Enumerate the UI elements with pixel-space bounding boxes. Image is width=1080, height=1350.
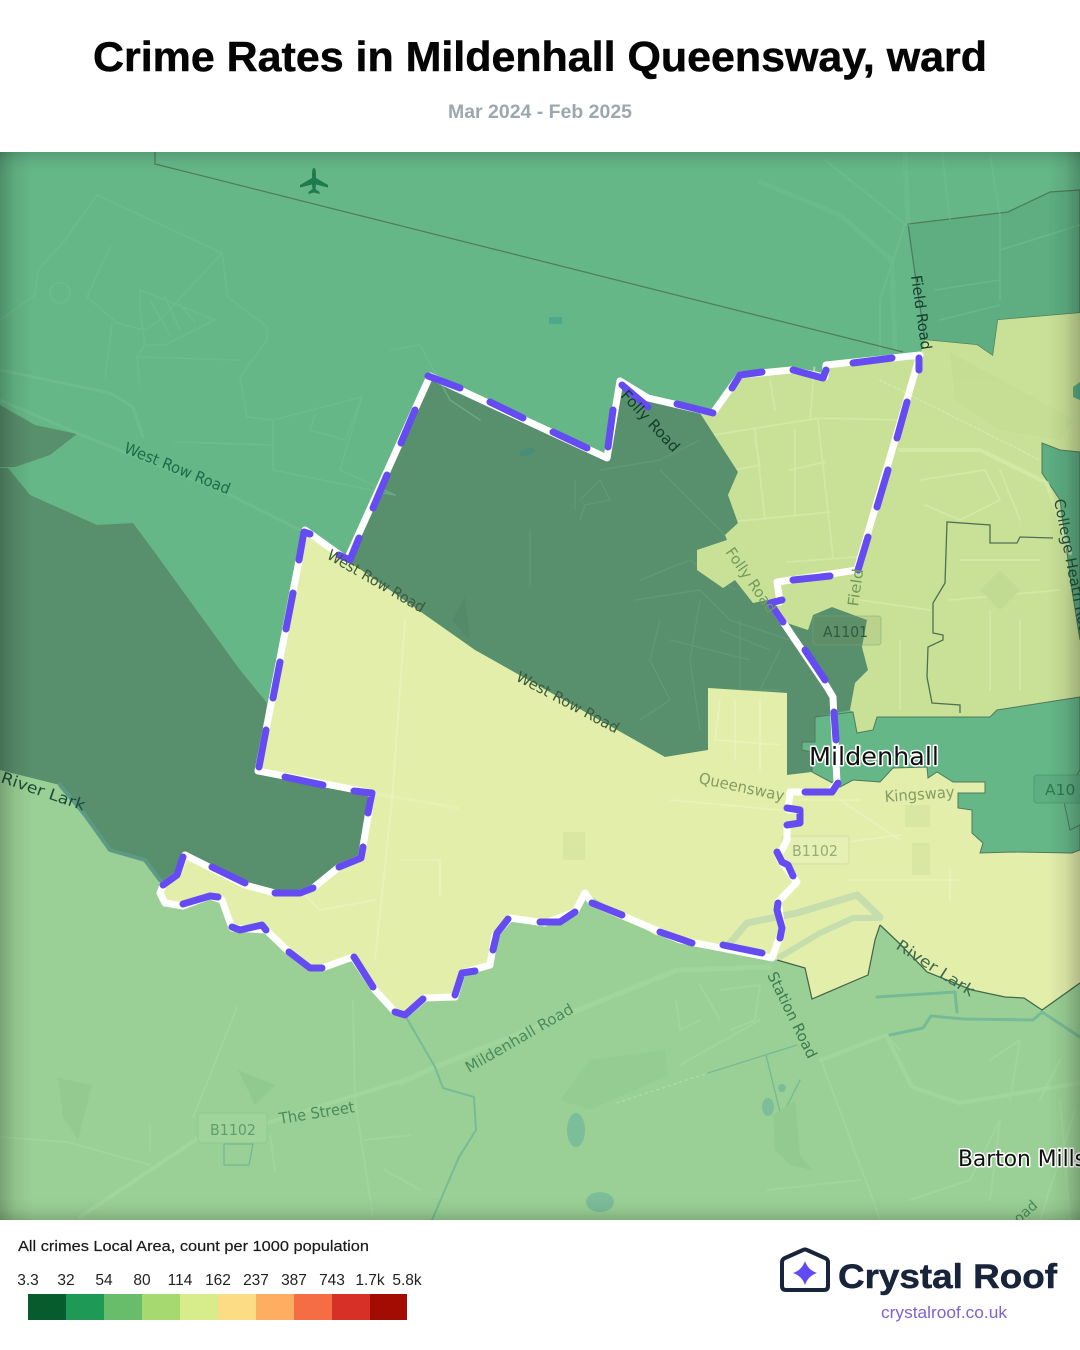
title: Crime Rates in Mildenhall Queensway, ward bbox=[93, 33, 987, 80]
road shield: A10 bbox=[1034, 775, 1080, 803]
legend scale labels: 237 bbox=[243, 1272, 269, 1289]
legend scale labels: 162 bbox=[205, 1272, 231, 1289]
legend scale labels: 3.3 bbox=[17, 1272, 39, 1289]
ward boundary: Station Road edge bbox=[777, 925, 880, 999]
map area: medium green Mildenhall centre bbox=[802, 697, 1080, 853]
map area: inner north-east ward outline bbox=[927, 522, 1053, 713]
legend title: All crimes Local Area, count per 1000 population bbox=[18, 1238, 369, 1255]
map edge vignette bbox=[0, 152, 1080, 1220]
map area: green pocket far east bbox=[1073, 382, 1080, 400]
legend scale labels: 80 bbox=[133, 1272, 151, 1289]
legend scale labels: 5.8k bbox=[392, 1272, 422, 1289]
logo wordmark: Crystal Roof bbox=[838, 1258, 1058, 1296]
map area: pale yellow ward and town south bbox=[162, 530, 1080, 1014]
subtitle: date range: Mar 2024 - Feb 2025 bbox=[448, 102, 632, 123]
roads on pale yellow bbox=[300, 620, 960, 960]
road label: Field south: Field bbox=[844, 567, 867, 608]
legend scale labels: 1.7k bbox=[355, 1272, 385, 1289]
road shield: B1102 town: B1102 bbox=[792, 842, 838, 860]
road label: Queensway: Queensway bbox=[697, 769, 786, 805]
road label: clipped road: oad bbox=[1011, 1198, 1041, 1227]
river label: River Lark west: River Lark bbox=[0, 769, 88, 814]
ward outline: purple dashes bbox=[163, 358, 919, 1015]
river label: River Lark east: River Lark bbox=[893, 936, 978, 1000]
icon: house with star bbox=[782, 1250, 828, 1290]
ward boundary: River Lark edge east bbox=[880, 925, 1080, 1010]
map area: green pocket east edge bbox=[1042, 443, 1080, 640]
legend colour scale bbox=[28, 1294, 407, 1320]
road label: Folly Road north: Folly Road bbox=[617, 386, 683, 456]
River Lark water west bbox=[60, 785, 160, 880]
road label: West Row Road west: West Row Road bbox=[122, 439, 233, 498]
ward outline: white line bbox=[160, 355, 920, 1015]
road label: Field Road north: Field Road bbox=[907, 274, 935, 351]
map area: dark green centre bbox=[347, 376, 868, 775]
legend scale labels: 54 bbox=[95, 1272, 113, 1289]
map area: southern light green bbox=[0, 770, 1080, 1220]
road label: Station Road: Station Road bbox=[763, 969, 821, 1061]
map roads and minor features bbox=[0, 152, 1080, 1220]
legend scale labels: 114 bbox=[168, 1272, 193, 1289]
road shield: A10: A10 bbox=[1045, 781, 1075, 799]
road label: Mildenhall Road: Mildenhall Road bbox=[462, 1000, 577, 1076]
road label: Folly Road south: Folly Road bbox=[722, 544, 780, 617]
ponds and woodland patches bbox=[58, 317, 812, 1212]
map area: light yellow-green north-east bbox=[697, 313, 1080, 733]
legend scale labels: 32 bbox=[57, 1272, 75, 1289]
map labels bbox=[0, 274, 1080, 1227]
choropleth map bbox=[0, 152, 1080, 1227]
road shield: A1101 bbox=[813, 616, 881, 645]
map area: dark green lobe bbox=[0, 405, 77, 467]
legend scale labels bbox=[17, 1272, 422, 1289]
logo: Crystal Roof bbox=[782, 1250, 1058, 1322]
legend scale labels: 743 bbox=[319, 1272, 345, 1289]
road label: West Row Road centre: West Row Road bbox=[513, 668, 622, 737]
road shield: B1102 south bbox=[198, 1113, 267, 1143]
legend scale labels: 387 bbox=[281, 1272, 307, 1289]
roads on light yellow-green bbox=[713, 352, 1075, 710]
ward boundary: airfield line bbox=[155, 152, 903, 352]
main road: West Row Road bbox=[0, 370, 300, 530]
roads on medium green bbox=[383, 212, 1080, 496]
road shield: B1102 town bbox=[782, 836, 849, 864]
map area: dark green west bbox=[0, 468, 372, 893]
roads on lower green bbox=[0, 967, 1080, 1220]
church outline near The Street bbox=[224, 1144, 253, 1165]
map area: north-east green ward bbox=[908, 190, 1080, 356]
road label: The Street: The Street bbox=[277, 1098, 356, 1128]
roads on dark green bbox=[520, 440, 794, 730]
river channels through town bbox=[730, 895, 880, 943]
road label: West Row Road ward edge: West Row Road bbox=[324, 546, 428, 616]
ward outline with dashes bbox=[160, 355, 920, 1015]
legend bbox=[17, 1238, 422, 1320]
place label: Mildenhall: Mildenhall bbox=[809, 742, 939, 771]
website link text: crystalroof.co.uk bbox=[881, 1304, 1008, 1322]
icon: airport plane bbox=[300, 168, 328, 194]
river and streams bbox=[406, 992, 1080, 1220]
road shield: B1102 south: B1102 bbox=[210, 1121, 256, 1139]
road shield: A1101: A1101 bbox=[823, 623, 868, 641]
road label: Kingsway: Kingsway bbox=[884, 783, 955, 806]
map area: medium green base bbox=[0, 152, 1080, 960]
